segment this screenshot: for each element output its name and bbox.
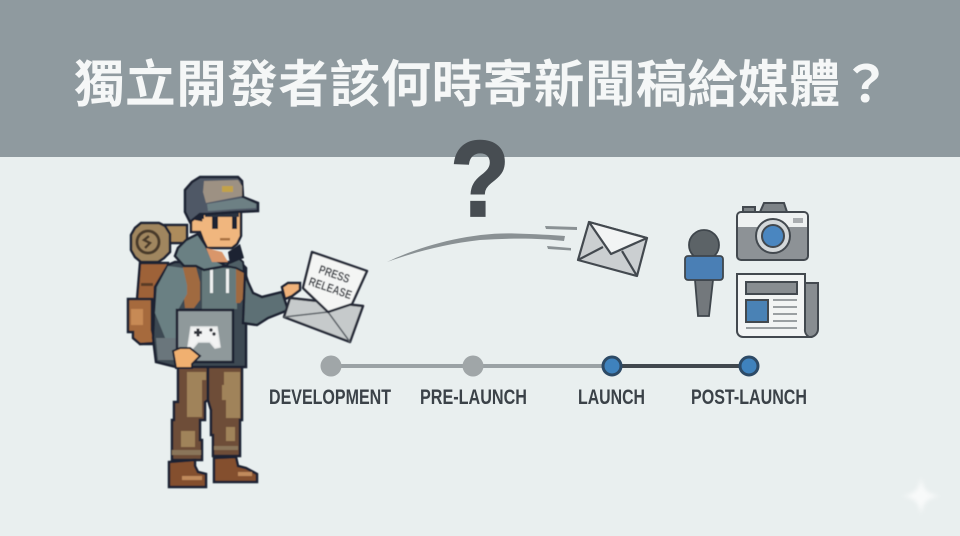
timeline labels: PRE-LAUNCH (420, 386, 527, 409)
paper text: PRESS (317, 263, 351, 286)
sparkle watermark (902, 477, 940, 515)
icon: microphone (685, 230, 723, 316)
timeline labels: DEVELOPMENT (269, 386, 391, 409)
node: post-launch (740, 357, 758, 375)
press release envelope (284, 252, 367, 342)
motion swoosh (387, 226, 577, 262)
boots (169, 457, 257, 487)
title: 獨立開發者該何時寄新聞稿給媒體？ (74, 56, 892, 113)
timeline (320, 356, 758, 376)
timeline labels (269, 386, 807, 409)
press release paper (303, 252, 367, 312)
hood strings (210, 269, 213, 293)
lower hand (173, 348, 200, 368)
hood (175, 234, 226, 270)
node: launch (603, 357, 621, 375)
timeline labels: POST-LAUNCH (691, 386, 807, 409)
paper text: RELEASE (307, 275, 353, 302)
hoodie body (153, 262, 246, 367)
backpack (128, 223, 187, 344)
gamepad (188, 327, 220, 348)
head (191, 205, 244, 264)
paper text (307, 263, 353, 302)
header band (0, 0, 960, 157)
speed lines (545, 226, 577, 230)
timeline labels: LAUNCH (578, 386, 645, 409)
legs (172, 362, 242, 460)
character: indie developer with backpack (128, 177, 367, 487)
cap (185, 177, 258, 222)
laptop with gamepad (177, 310, 233, 362)
icon: flying envelope (578, 222, 647, 276)
icon: camera (737, 203, 808, 260)
node: development (320, 356, 342, 376)
question mark: ? (450, 118, 510, 239)
node: pre-launch (462, 356, 484, 376)
arm and hand (243, 273, 300, 325)
icon: newspaper (737, 274, 818, 337)
